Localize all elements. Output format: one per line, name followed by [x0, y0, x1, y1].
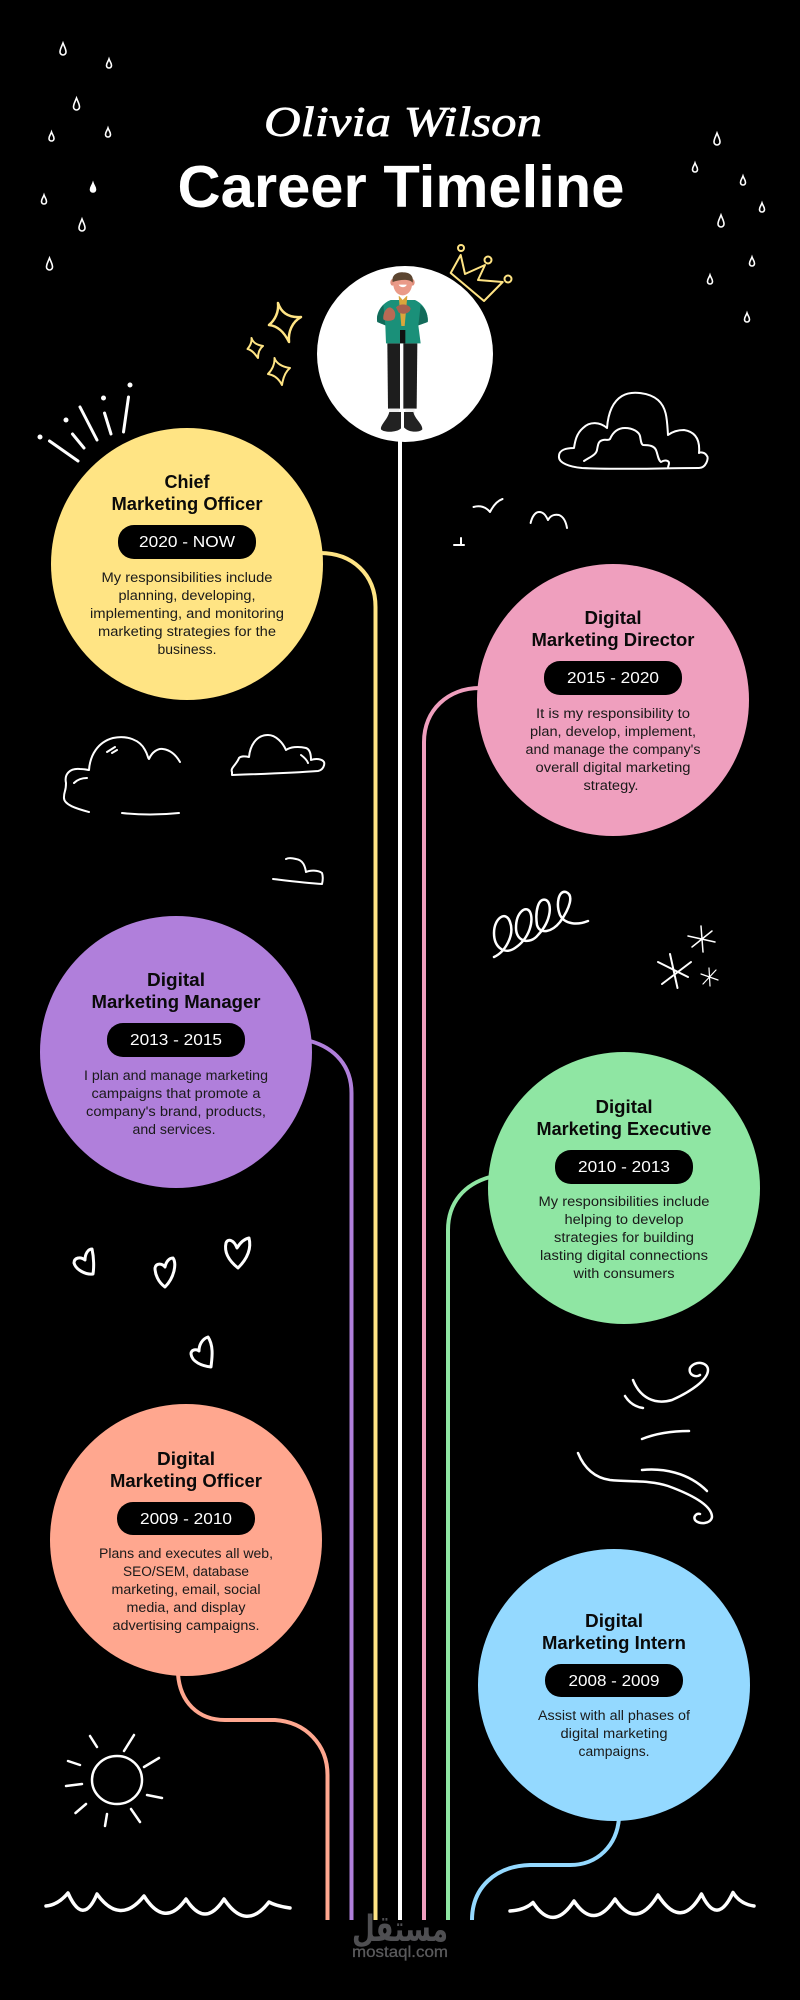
heading: Digital: [147, 969, 205, 990]
heading: [92, 969, 260, 1012]
description: My responsibilities include: [102, 570, 272, 585]
icon: loop scribble: [494, 892, 588, 957]
icon: crown: [451, 245, 512, 301]
description: marketing, email, social: [112, 1582, 260, 1597]
watermark: mostaql: [352, 1909, 448, 1961]
heading: Marketing Officer: [110, 1470, 262, 1491]
description: advertising campaigns.: [112, 1618, 260, 1633]
description: planning, developing,: [118, 588, 256, 603]
icon: sun: [66, 1735, 162, 1826]
description: My responsibilities include: [538, 1194, 710, 1209]
heading: [542, 1610, 686, 1653]
description: SEO/SEM, database: [123, 1564, 249, 1579]
panel: digital marketing director: [477, 564, 749, 836]
year pill: [545, 1664, 683, 1697]
description: Assist with all phases of: [538, 1708, 690, 1723]
icon: yellow sparkles: [248, 303, 301, 385]
year pill: [555, 1150, 693, 1184]
description: I plan and manage marketing: [84, 1068, 268, 1083]
description: [538, 1708, 690, 1759]
description: strategy.: [584, 778, 638, 793]
description: strategies for building: [554, 1230, 694, 1245]
icon: wind swirls: [578, 1363, 712, 1523]
description: overall digital marketing: [536, 760, 690, 775]
description: and services.: [132, 1122, 216, 1137]
description: implementing, and monitoring: [90, 606, 284, 621]
icon: raindrops right: [692, 133, 764, 322]
line: white centre: [398, 440, 402, 1920]
icon: birds: [454, 499, 567, 545]
description: marketing strategies for the: [98, 624, 276, 639]
year pill: [544, 661, 682, 695]
icon: small cloud: [273, 858, 323, 884]
year pill: 2008 - 2009: [568, 1673, 660, 1690]
portrait: white circle with person: [317, 266, 493, 442]
year pill: 2020 - NOW: [139, 534, 236, 551]
panel: chief marketing officer: [51, 428, 323, 700]
heading: [110, 1448, 262, 1491]
icon: cloud centre left: [232, 735, 324, 775]
line: digital marketing director: [424, 688, 480, 1920]
description: plan, develop, implement,: [530, 724, 696, 739]
panel: digital marketing manager: [40, 916, 312, 1188]
icon: hearts: [74, 1238, 250, 1367]
icon: cloud left: [64, 737, 180, 814]
description: [90, 570, 284, 657]
heading: Digital: [157, 1448, 215, 1469]
year pill: 2010 - 2013: [578, 1159, 670, 1176]
description: helping to develop: [564, 1212, 684, 1227]
line: digital marketing officer: [178, 1674, 328, 1920]
description: [99, 1546, 273, 1633]
line: chief marketing officer: [320, 553, 376, 1920]
title: career timeline: Career Timeline: [178, 154, 624, 220]
heading: Marketing Director: [532, 629, 694, 650]
description: [538, 1194, 710, 1281]
description: with consumers: [572, 1266, 675, 1281]
line: digital marketing executive: [448, 1177, 490, 1920]
year pill: [118, 525, 256, 559]
panel: digital marketing executive: [488, 1052, 760, 1324]
heading: [532, 607, 694, 650]
description: and manage the company's: [526, 742, 701, 757]
heading: Chief: [164, 471, 210, 492]
heading: Marketing Officer: [112, 493, 262, 514]
illustration: standing man in teal jacket: [377, 272, 428, 432]
description: digital marketing: [560, 1726, 668, 1741]
icon: large cloud top right: [559, 393, 708, 469]
icon: raindrops left: [42, 43, 112, 270]
heading: Digital: [585, 1610, 643, 1631]
icon: wave right: [510, 1892, 754, 1917]
icon: asterisk stars: [658, 926, 718, 988]
description: media, and display: [126, 1600, 246, 1615]
panel: digital marketing officer: [50, 1404, 322, 1676]
heading: Digital: [596, 1096, 652, 1117]
line: digital marketing intern: [472, 1818, 619, 1920]
icon: wave left: [46, 1893, 290, 1916]
description: campaigns.: [578, 1744, 650, 1759]
year pill: 2013 - 2015: [130, 1032, 222, 1049]
line: digital marketing manager: [310, 1041, 352, 1920]
timeline connector lines: [178, 440, 619, 1920]
description: Plans and executes all web,: [99, 1546, 273, 1561]
year pill: 2015 - 2020: [567, 670, 659, 687]
heading: Digital: [584, 607, 642, 628]
description: campaigns that promote a: [92, 1086, 261, 1101]
description: company's brand, products,: [86, 1104, 266, 1119]
description: lasting digital connections: [540, 1248, 708, 1263]
year pill: 2009 - 2010: [140, 1511, 232, 1528]
description: business.: [158, 642, 216, 657]
year pill: [117, 1502, 255, 1535]
description: It is my responsibility to: [536, 706, 690, 721]
heading: [536, 1096, 712, 1139]
icon: burst lines: [39, 384, 131, 461]
description: [84, 1068, 268, 1137]
panel: digital marketing intern: [478, 1549, 750, 1821]
watermark: mostaql: mostaql.com: [352, 1944, 448, 1961]
title: name: Olivia Wilson: [264, 100, 542, 146]
heading: Marketing Intern: [542, 1632, 686, 1653]
heading: Marketing Manager: [92, 991, 260, 1012]
description: [526, 706, 701, 793]
heading: Marketing Executive: [536, 1118, 712, 1139]
year pill: [107, 1023, 245, 1057]
heading: [112, 471, 262, 514]
watermark: mostaql: مستقل: [352, 1909, 448, 1950]
